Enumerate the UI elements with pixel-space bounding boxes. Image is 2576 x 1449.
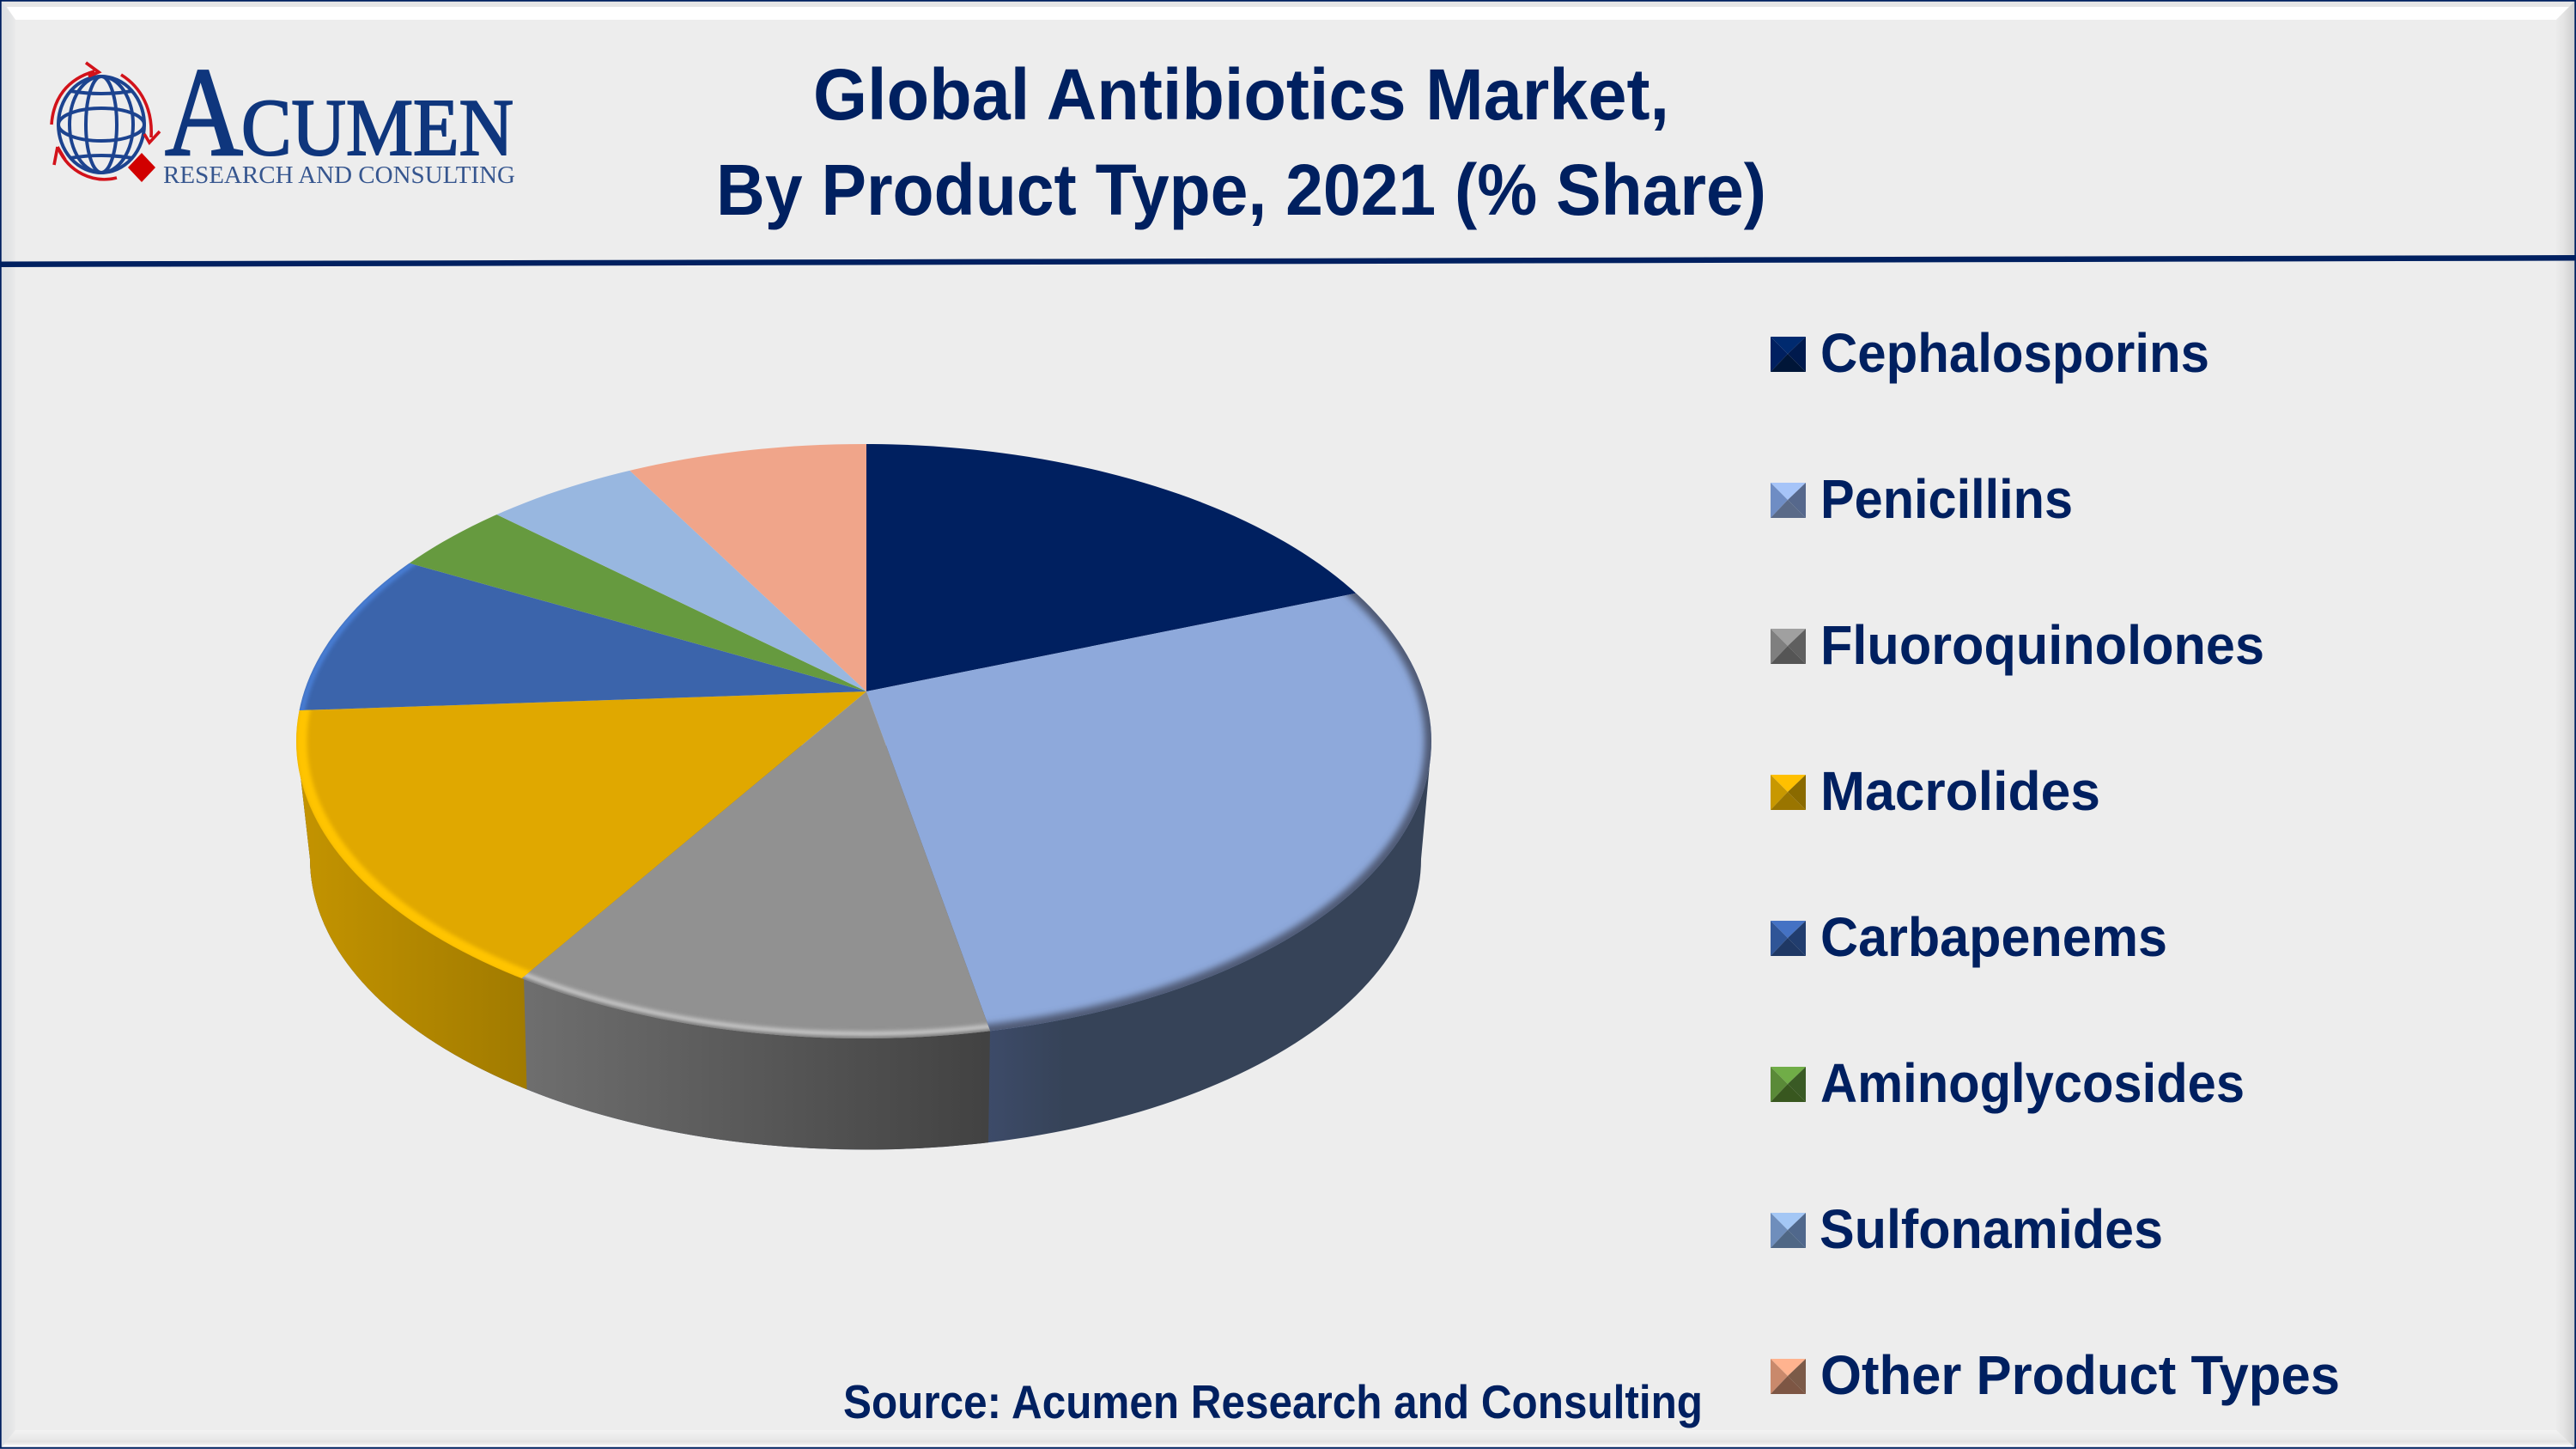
logo: Acumen Research and Consulting: [52, 42, 515, 189]
icon: globe with red arrows: [52, 63, 160, 182]
legend item: Other Product Types: Other Product Types: [1820, 1344, 2340, 1406]
title: Global Antibiotics Market,: [813, 54, 1669, 135]
pie top surface: [296, 444, 1431, 1038]
legend item: Fluoroquinolones: Fluoroquinolones: [1820, 614, 2264, 676]
slice: Macrolides: [296, 691, 866, 978]
title: [716, 54, 1766, 230]
title: By Product Type, 2021 (% Share): [716, 149, 1766, 230]
legend item: Penicillins: Penicillins: [1820, 468, 2073, 530]
logo wordmark: [163, 42, 515, 189]
logo wordmark: CUMEN: [241, 83, 513, 173]
slice: Fluoroquinolones: [522, 691, 990, 1038]
slice: Carbapenems: [299, 563, 866, 710]
logo wordmark: A: [165, 42, 243, 183]
header divider rule: [0, 255, 2576, 267]
slice: Penicillins: [866, 593, 1431, 1031]
chart: 3D pie of product type share: [296, 444, 1431, 1149]
legend: [1771, 322, 2340, 1406]
legend item: Aminoglycosides: Aminoglycosides: [1820, 1052, 2245, 1114]
logo wordmark: RESEARCH AND CONSULTING: [163, 161, 515, 189]
legend item: Cephalosporins: Cephalosporins: [1820, 322, 2209, 384]
legend item: Sulfonamides: Sulfonamides: [1820, 1198, 2163, 1260]
legend item: Carbapenems: Carbapenems: [1820, 906, 2167, 968]
source note: Source: Acumen Research and Consulting: [843, 1375, 1703, 1428]
pie side wall: [301, 746, 1431, 1149]
slice: Sulfonamides: [496, 471, 866, 691]
slice: Aminoglycosides: [409, 514, 866, 691]
legend item: Macrolides: Macrolides: [1820, 760, 2100, 822]
slice: Cephalosporins: [866, 444, 1357, 691]
slice: Other Product Types: [630, 444, 866, 691]
